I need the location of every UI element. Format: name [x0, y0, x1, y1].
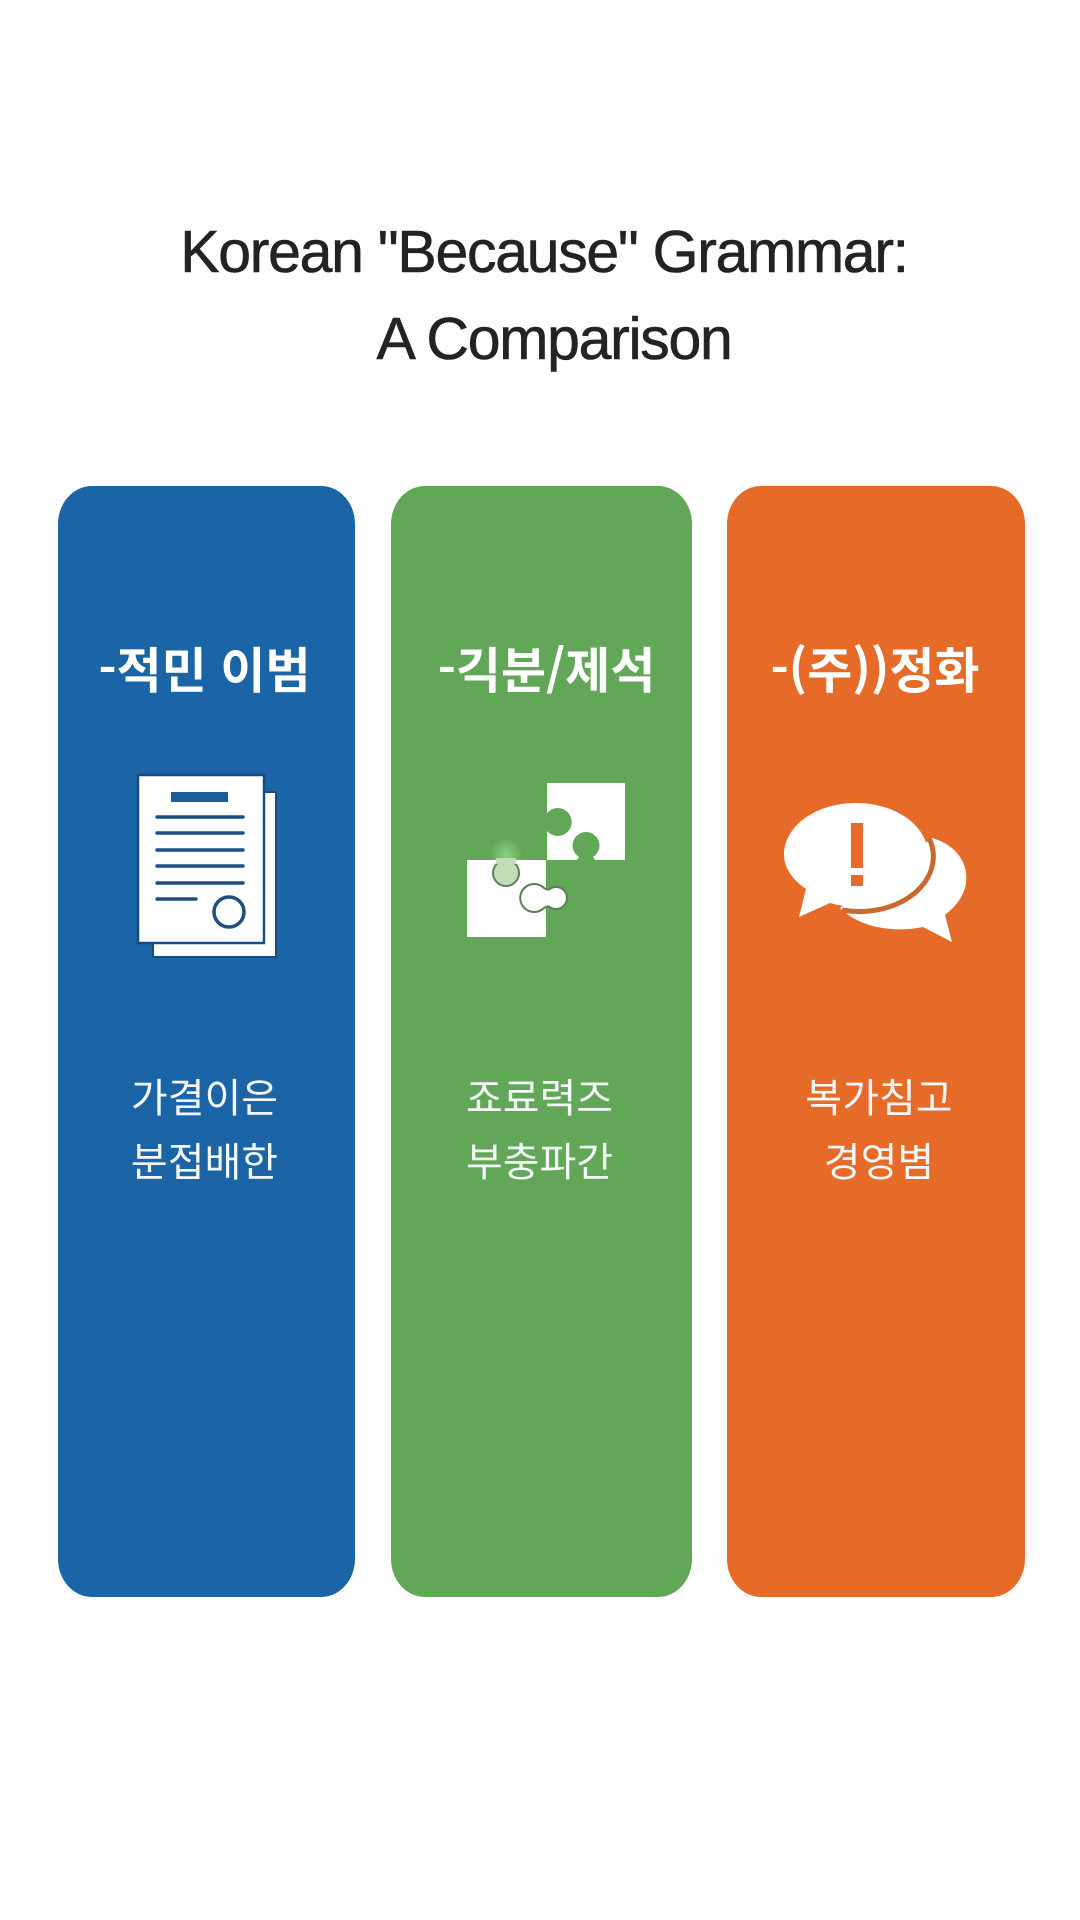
text: green panel: 죠료력즈	[466, 1066, 613, 1124]
title	[180, 219, 908, 372]
text: blue panel: 분접배한	[131, 1130, 278, 1188]
icon: documents	[136, 774, 277, 958]
text: orange panel	[805, 1066, 953, 1188]
icon: puzzle pieces	[467, 783, 625, 937]
text: blue panel: 가결이은	[131, 1066, 278, 1124]
heading: blue panel: -적민 이범	[98, 632, 311, 703]
panel: orange	[727, 486, 1025, 1597]
icon: speech bubbles	[784, 803, 966, 942]
heading: green panel: -긱분/제석	[438, 632, 655, 703]
panel: blue	[58, 486, 355, 1597]
text: orange panel: 복가침고	[805, 1066, 953, 1124]
text: green panel: 부충파간	[466, 1130, 613, 1188]
heading: orange panel: -(주))정화	[770, 632, 980, 703]
text: blue panel	[131, 1066, 278, 1188]
panel: green	[391, 486, 692, 1597]
text: orange panel: 경영볌	[824, 1130, 934, 1188]
title: A Comparison	[377, 306, 731, 372]
title: Korean "Because" Grammar:	[180, 219, 908, 285]
text: green panel	[466, 1066, 613, 1188]
